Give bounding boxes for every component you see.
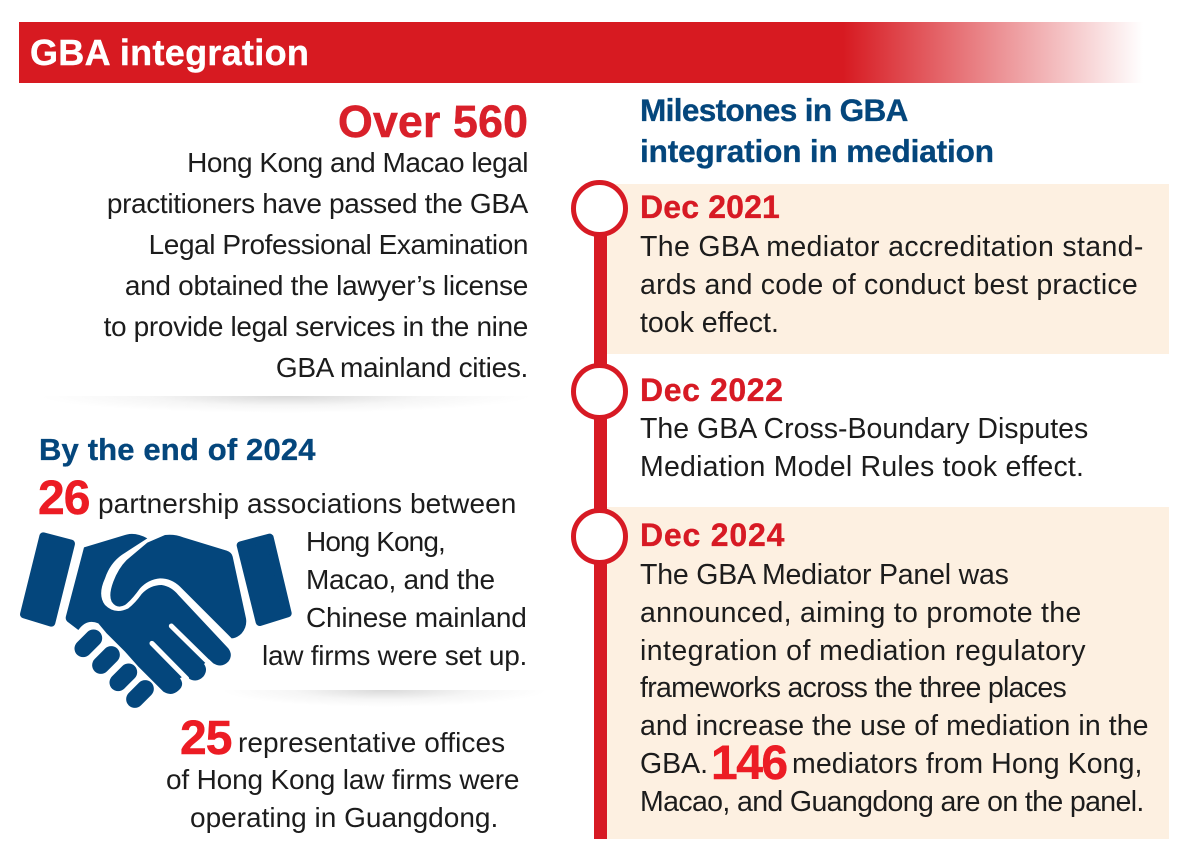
date: Dec 2024: Dec 2024 bbox=[640, 517, 785, 553]
text: Dec 2024 bbox=[640, 559, 1149, 818]
number 25: 25 bbox=[180, 712, 231, 765]
text: associations rest bbox=[306, 526, 527, 633]
text block: legal practitioners: practitioners have passed the GBA bbox=[107, 188, 528, 219]
text: Dec 2022: The GBA Cross-Boundary Disputes bbox=[640, 413, 1088, 445]
icon: handshake bbox=[20, 532, 292, 708]
marker: Dec 2021 bbox=[571, 180, 628, 237]
date: Dec 2022: Dec 2022 bbox=[640, 372, 784, 408]
title banner bbox=[19, 22, 1143, 83]
text: Dec 2021 bbox=[640, 231, 1144, 339]
text: associations rest: Macao, and the bbox=[306, 564, 495, 595]
stat: 26 partnership associations bbox=[38, 472, 527, 671]
text block: legal practitioners: to provide legal services in the nine bbox=[104, 311, 528, 342]
text: Dec 2024: integration of mediation regulatory bbox=[640, 635, 1086, 667]
text: Dec 2024: frameworks across the three places bbox=[640, 672, 1066, 704]
text block: legal practitioners: GBA mainland cities. bbox=[276, 352, 528, 383]
text: Dec 2024: mediators from Hong Kong, bbox=[792, 748, 1142, 780]
heading: milestones bbox=[640, 92, 994, 169]
text block: legal practitioners: Legal Professional Examination bbox=[149, 229, 528, 260]
marker: Dec 2024 bbox=[571, 508, 628, 565]
marker: Dec 2022 bbox=[571, 363, 628, 420]
text: Dec 2021: The GBA mediator accreditation stand- bbox=[640, 231, 1144, 263]
heading: milestones: Milestones in GBA bbox=[640, 92, 908, 128]
text: Dec 2024: GBA. bbox=[640, 748, 708, 780]
text: Dec 2024: The GBA Mediator Panel was bbox=[640, 559, 1009, 591]
text: associations rest: Hong Kong, bbox=[306, 526, 445, 557]
text block: legal practitioners: Hong Kong and Macao legal bbox=[187, 147, 528, 178]
text: last line: law firms were set up. bbox=[262, 640, 527, 671]
text: Dec 2022: Mediation Model Rules took effect. bbox=[640, 451, 1084, 483]
timeline line bbox=[594, 205, 607, 839]
text block: legal practitioners bbox=[104, 147, 528, 383]
text: Dec 2024: Macao, and Guangdong are on the panel. bbox=[640, 786, 1144, 818]
panel: Dec 2021 bbox=[607, 184, 1169, 354]
number 26: 26 bbox=[38, 472, 89, 525]
text: Dec 2024: announced, aiming to promote the bbox=[640, 597, 1082, 629]
text: offices line: representative offices bbox=[238, 727, 505, 758]
heading: over 560: Over 560 bbox=[338, 96, 528, 147]
text: associations rest: Chinese mainland bbox=[306, 602, 527, 633]
title: GBA integration bbox=[30, 32, 309, 73]
stat: 25 representative offices bbox=[166, 712, 519, 833]
text: Dec 2024: and increase the use of mediation in the bbox=[640, 710, 1149, 742]
text: Dec 2022 bbox=[640, 413, 1088, 483]
panel: Dec 2024 bbox=[607, 507, 1169, 839]
text: Dec 2024: 146 bbox=[711, 737, 787, 790]
text: Dec 2021: ards and code of conduct best practice bbox=[640, 269, 1138, 301]
date: Dec 2021: Dec 2021 bbox=[640, 189, 780, 225]
heading: by the end of 2024: By the end of 2024 bbox=[39, 432, 316, 467]
text: associations line: partnership associations between bbox=[98, 488, 516, 519]
text: offices rest: of Hong Kong law firms were bbox=[166, 764, 519, 795]
text: offices last: operating in Guangdong. bbox=[190, 802, 498, 833]
heading: milestones: integration in mediation bbox=[640, 132, 994, 168]
text block: legal practitioners: and obtained the lawyer’s license bbox=[125, 270, 528, 301]
text: Dec 2021: took effect. bbox=[640, 307, 779, 339]
